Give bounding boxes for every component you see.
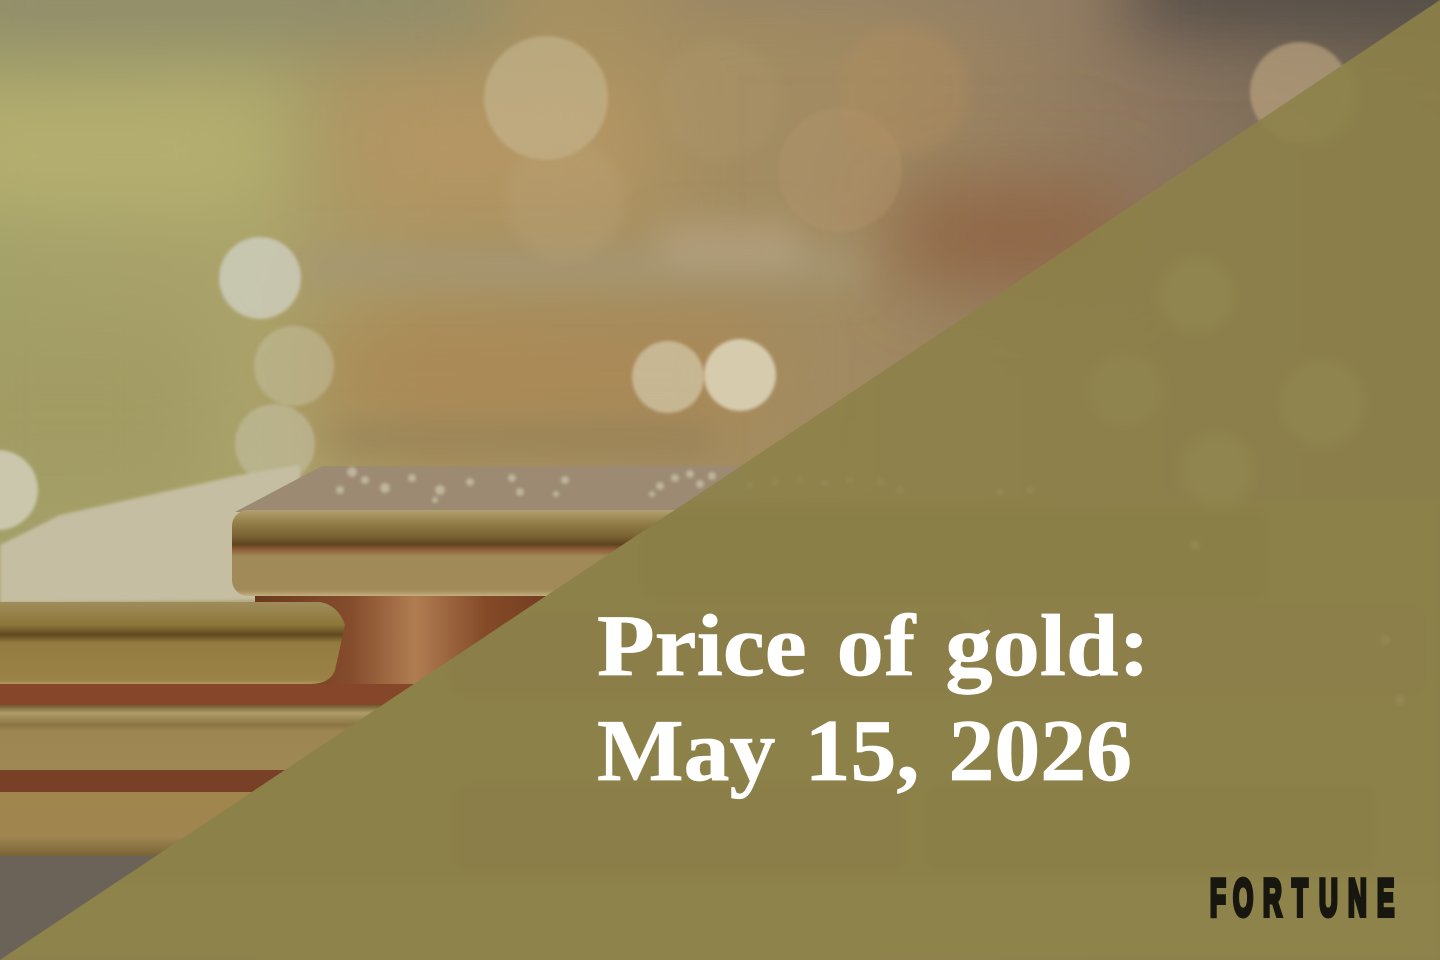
top face of the upper bar (235, 466, 760, 512)
white reflective surface (0, 465, 300, 603)
title: Price of gold: (597, 598, 1150, 695)
fourth bar (0, 770, 320, 794)
gold bar stack (0, 465, 792, 960)
logo: FORTUNE: FORTUNE (1210, 869, 1394, 927)
second bar (0, 602, 345, 684)
table surface (0, 856, 255, 960)
title: May 15, 2026 (597, 703, 1132, 800)
rust gap between bars (255, 592, 575, 704)
bokeh lights (0, 25, 1350, 530)
third bar (0, 684, 420, 706)
engraved dimples (336, 467, 716, 503)
upper bar (232, 510, 792, 596)
title (597, 598, 1150, 800)
bars and lights under the overlay (2, 504, 1404, 958)
